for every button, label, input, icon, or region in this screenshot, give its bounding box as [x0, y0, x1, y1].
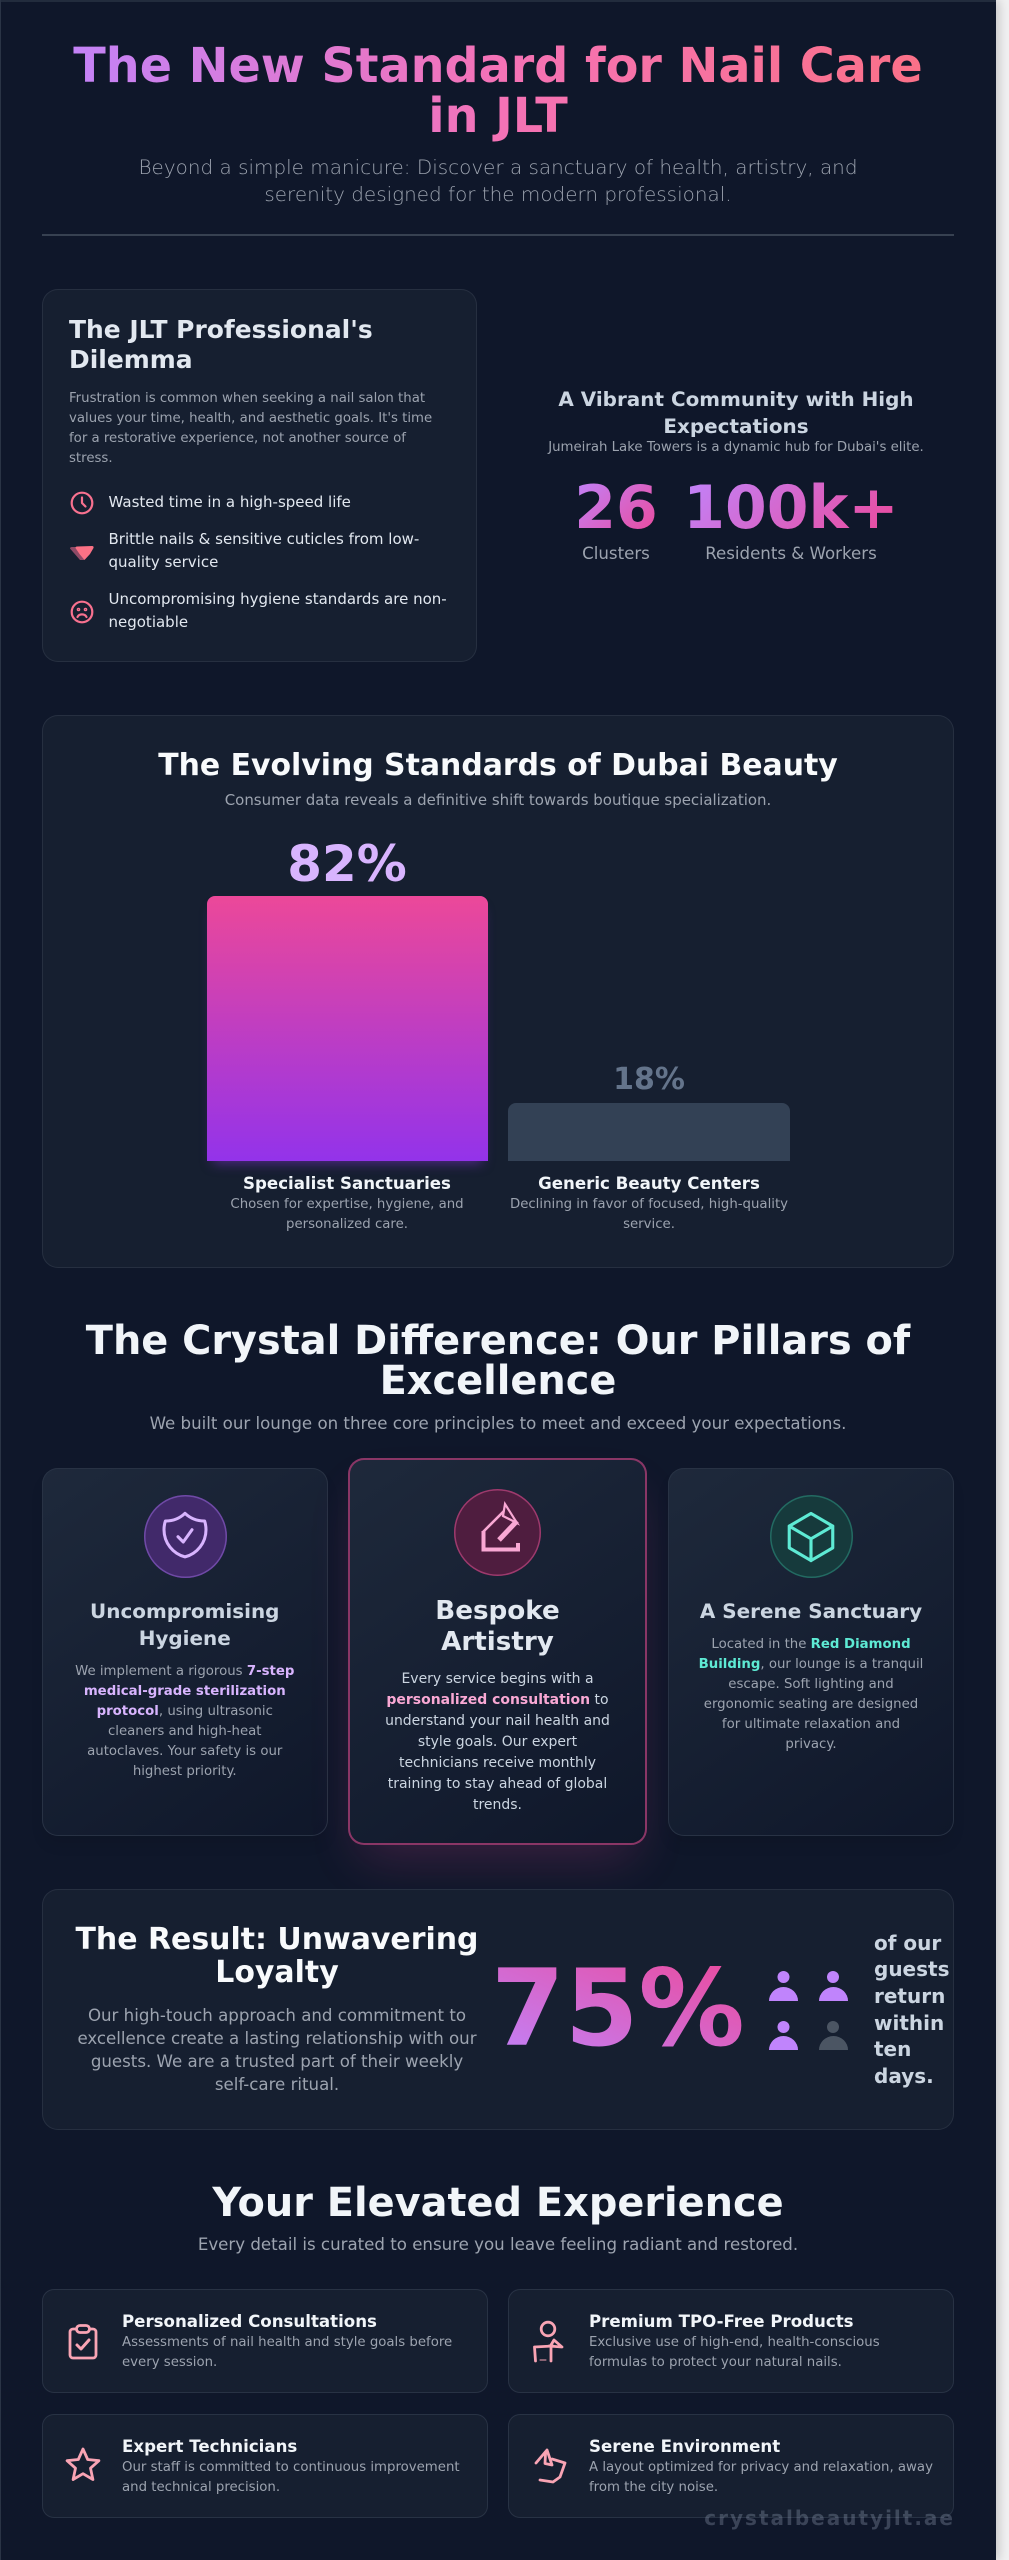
text: artistry description	[385, 1671, 610, 1813]
heading: bespoke artistry	[435, 1596, 560, 1657]
list item: hygiene standards	[70, 590, 447, 631]
heading: dilemma: Dilemma	[69, 345, 193, 374]
label: specialist sanctuaries	[230, 1174, 464, 1232]
text: community description: Jumeirah Lake Towers is a dynamic hub for Dubai's elite.	[548, 440, 924, 455]
text: hygiene description: autoclaves. Your safety is our	[87, 1744, 282, 1759]
text: hygiene description	[75, 1664, 294, 1779]
label: generic beauty centers: Declining in favor of focused, high-quality	[510, 1197, 788, 1212]
text: guests return: of our	[874, 1931, 941, 1955]
text: dilemma description	[69, 391, 432, 466]
panel: professional's dilemma	[42, 289, 477, 662]
card: serene environment	[508, 2414, 954, 2518]
list item: wasted time: Wasted time in a high-speed life	[108, 492, 351, 510]
subtitle: serenity designed for the modern professional.	[264, 182, 732, 206]
text: dilemma description: Frustration is common when seeking a nail salon that	[69, 391, 425, 406]
text: consultations: every session.	[122, 2355, 217, 2370]
stat: clusters: 26	[574, 473, 658, 543]
heading: bespoke artistry: Artistry	[441, 1627, 554, 1657]
icon: shield	[144, 1495, 226, 1578]
panel: hygiene pillar	[42, 1468, 328, 1836]
list item: brittle nails: quality service	[108, 553, 218, 571]
text: result description: self-care ritual.	[215, 2075, 339, 2094]
panel: evolving standards	[42, 715, 954, 1268]
text: sanctuary description: Building, our lounge is a tranquil	[699, 1657, 923, 1672]
text: result description	[77, 2006, 477, 2094]
label: specialist sanctuaries: Chosen for expertise, hygiene, and	[230, 1197, 464, 1212]
text: guests return: return	[874, 1984, 945, 2008]
block: vibrant community	[548, 387, 924, 562]
text: dilemma description: for a restorative experience, not another source of	[69, 431, 406, 446]
text: technicians	[122, 2437, 460, 2495]
text: consultations	[122, 2312, 452, 2370]
text: artistry description: style goals. Our expert	[418, 1734, 577, 1750]
text: artistry description: technicians receive monthly	[399, 1755, 596, 1771]
text: products: formulas to protect your natural nails.	[589, 2355, 842, 2370]
label: generic beauty centers: Generic Beauty Centers	[538, 1174, 760, 1193]
text: consumer data: Consumer data reveals a definitive shift towards boutique specialization.	[225, 790, 771, 808]
heading: serene sanctuary: A Serene Sanctuary	[700, 1599, 922, 1623]
watermark: crystalbeautyjlt.ae	[704, 2506, 955, 2530]
text: products: Premium TPO-Free Products	[589, 2312, 854, 2331]
text: sanctuary description: Located in the Red Diamond	[711, 1637, 911, 1652]
heading: result: Loyalty	[215, 1954, 339, 1990]
label: specialist sanctuaries: personalized care.	[286, 1217, 408, 1232]
heading: community: Expectations	[663, 414, 809, 438]
text: guests return	[874, 1931, 950, 2088]
text: pillars intro: We built our lounge on three core principles to meet and exceed your expectations.	[150, 1414, 846, 1433]
text: artistry description: Every service begins with a	[401, 1671, 594, 1687]
text: artistry description: understand your nail health and	[385, 1713, 610, 1729]
card: premium products	[508, 2289, 954, 2393]
text: environment: A layout optimized for privacy and relaxation, away	[589, 2460, 933, 2475]
heading: crystal difference	[86, 1318, 911, 1404]
text: dilemma description: stress.	[69, 451, 113, 466]
text: result description: Our high-touch approach and commitment to	[88, 2006, 466, 2025]
text: artistry description: personalized consultation to	[386, 1692, 609, 1708]
text: result description: guests. We are a trusted part of their weekly	[91, 2052, 463, 2071]
heading: crystal difference: The Crystal Difference: Our Pillars of	[86, 1318, 910, 1364]
heading: uncompromising hygiene	[90, 1599, 279, 1650]
card: expert technicians	[42, 2414, 488, 2518]
heading: result: The Result: Unwavering	[76, 1922, 478, 1956]
panel: sanctuary pillar	[668, 1468, 954, 1836]
label: specialist sanctuaries: Specialist Sanctuaries	[243, 1174, 451, 1193]
text: products: Exclusive use of high-end, health-conscious	[589, 2335, 880, 2350]
card: personalized consultations	[42, 2289, 488, 2393]
text: artistry description: trends.	[473, 1797, 522, 1813]
text: hygiene description: highest priority.	[133, 1764, 237, 1779]
panel: unwavering loyalty	[42, 1889, 954, 2130]
text: result description: excellence create a lasting relationship with our	[77, 2029, 477, 2048]
text: sanctuary description: privacy.	[785, 1737, 837, 1752]
stat: 75%: 75%	[491, 1947, 745, 2070]
icon: star	[66, 2448, 100, 2481]
text: sanctuary description	[699, 1637, 923, 1752]
subtitle: Beyond a simple manicure: Discover a sanctuary of health, artistry, and	[138, 155, 858, 179]
icon: clipboard	[68, 2324, 98, 2360]
text: products	[589, 2312, 880, 2370]
title: The New Standard for Nail Care	[73, 39, 923, 94]
text: sanctuary description: ergonomic seating are designed	[704, 1697, 918, 1712]
label: generic beauty centers	[510, 1174, 788, 1232]
heading: bespoke artistry: Bespoke	[435, 1596, 560, 1626]
text: environment: Serene Environment	[589, 2437, 780, 2456]
heading: uncompromising hygiene: Hygiene	[139, 1626, 231, 1650]
stat: residents and workers: 100k+	[683, 473, 899, 543]
heading: dilemma: The JLT Professional's	[69, 315, 373, 344]
list item: brittle nails	[70, 530, 419, 571]
text: experience intro: Every detail is curated to ensure you leave feeling radiant and restored.	[198, 2235, 798, 2254]
list item: wasted time	[70, 492, 351, 514]
title	[42, 42, 954, 142]
heading: uncompromising hygiene: Uncompromising	[90, 1599, 279, 1623]
text: hygiene description: cleaners and high-heat	[108, 1724, 262, 1739]
icon: seated person	[533, 2320, 564, 2362]
heading: community	[558, 387, 914, 438]
text: consultations: Personalized Consultations	[122, 2312, 377, 2331]
text: artistry description: training to stay ahead of global	[388, 1776, 607, 1792]
text: environment	[589, 2437, 933, 2495]
text: technicians: Our staff is committed to continuous improvement	[122, 2460, 460, 2475]
list item: hygiene standards: Uncompromising hygiene standards are non-	[108, 590, 447, 608]
subtitle	[138, 155, 858, 206]
text: guests return: within	[874, 2011, 944, 2035]
text: hygiene description: We implement a rigorous 7-step	[75, 1664, 294, 1679]
text: hygiene description: medical-grade sterilization	[84, 1684, 286, 1699]
heading: evolving standards: The Evolving Standards of Dubai Beauty	[158, 748, 838, 783]
text: guests return: days.	[874, 2064, 934, 2088]
heading: elevated experience: Your Elevated Experience	[212, 2180, 784, 2226]
stat: residents and workers: Residents & Workers	[705, 544, 877, 562]
icon: sad face	[70, 600, 94, 624]
title: in JLT	[428, 89, 568, 144]
panel: artistry pillar	[348, 1458, 647, 1845]
icon: hand	[534, 2448, 566, 2484]
text: environment: from the city noise.	[589, 2480, 718, 2495]
icon: people grid	[769, 1971, 848, 2050]
bar chart	[206, 835, 790, 1232]
text: dilemma description: values your time, health, and aesthetic goals. It's time	[69, 411, 432, 426]
icon: gem	[70, 546, 94, 560]
text: guests return: ten	[874, 2037, 911, 2061]
text: hygiene description: protocol, using ultrasonic	[97, 1704, 273, 1719]
heading: community: A Vibrant Community with High	[558, 387, 914, 411]
list item: brittle nails: Brittle nails & sensitive cuticles from low-	[108, 530, 419, 548]
icon: cube	[770, 1495, 852, 1578]
heading: dilemma	[69, 315, 373, 374]
text: technicians: Expert Technicians	[122, 2437, 297, 2456]
label: generic beauty centers: service.	[623, 1217, 675, 1232]
list item: hygiene standards: negotiable	[108, 613, 188, 631]
bar: generic beauty centers	[508, 1103, 790, 1161]
text: guests return: guests	[874, 1957, 950, 1981]
heading: result	[76, 1922, 478, 1990]
heading: crystal difference: Excellence	[380, 1358, 616, 1404]
value: 82%: 82%	[287, 835, 407, 893]
stat: clusters: Clusters	[582, 544, 650, 562]
text: consultations: Assessments of nail health and style goals before	[122, 2335, 452, 2350]
bar: specialist sanctuaries	[206, 896, 488, 1161]
icon: clock	[70, 492, 94, 514]
text: sanctuary description: for ultimate relaxation and	[722, 1717, 900, 1732]
value: 18%: 18%	[613, 1062, 685, 1097]
text: sanctuary description: escape. Soft lighting and	[728, 1677, 894, 1692]
text: technicians: and technical precision.	[122, 2480, 280, 2495]
icon: pen	[454, 1489, 541, 1576]
